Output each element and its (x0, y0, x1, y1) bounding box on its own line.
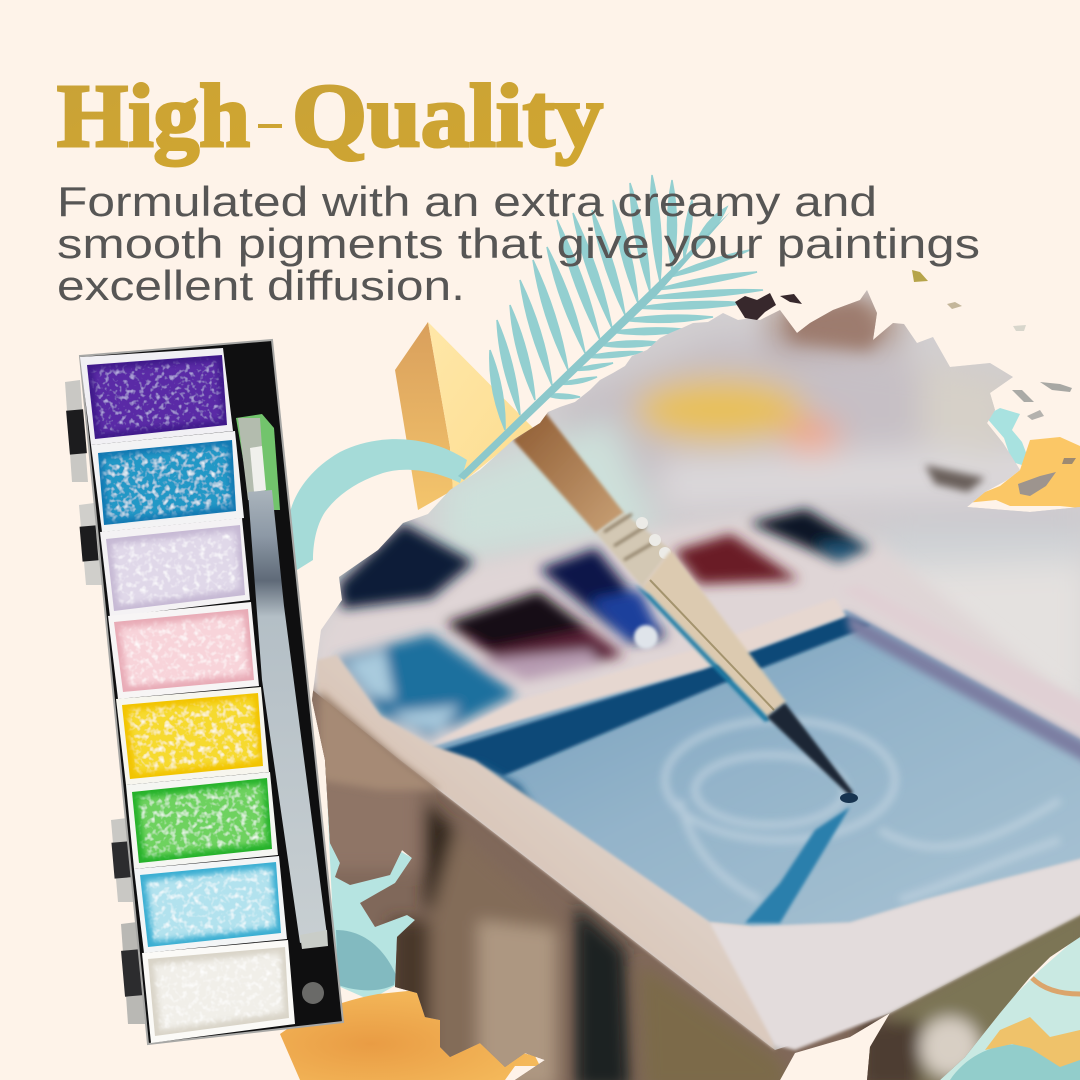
rachis (458, 212, 730, 480)
photo brush (513, 412, 858, 803)
icon: teal arc (289, 439, 467, 570)
body text: Formulated with an extra creamy and (57, 178, 877, 225)
heading: High (57, 67, 250, 166)
photo divider (431, 598, 846, 744)
tray thumb dot (302, 982, 324, 1004)
photo tray brown edge (790, 300, 880, 350)
tray hinges (65, 380, 145, 1024)
pan 5 yellow (116, 687, 269, 785)
blot above photo (735, 293, 802, 320)
photo: watercolor palette and brush (300, 285, 1080, 1080)
icon: yellow prism (395, 322, 547, 510)
pan 2 blue (91, 431, 244, 532)
pan 4 pink (108, 602, 259, 699)
splatter: bottom left teal and orange (280, 750, 540, 1080)
pan 6 green (126, 772, 278, 869)
heading: Quality (292, 67, 603, 166)
photo brush reflection (745, 807, 850, 923)
splatter: bottom right (930, 935, 1080, 1080)
pan 8 white (142, 940, 295, 1043)
pan 3 lilac (100, 518, 250, 617)
splatter: top right (912, 270, 1080, 508)
pan 7 cyan (134, 856, 287, 953)
body text: smooth pigments that give your paintings (57, 220, 980, 267)
photo background blur (440, 300, 1080, 730)
photo table wood (300, 680, 1080, 1080)
water brush (236, 414, 328, 949)
photo base (300, 285, 1080, 1080)
tray body (80, 340, 343, 1044)
photo water well (430, 584, 1080, 927)
heading (57, 67, 603, 166)
pan 1 purple (80, 348, 233, 445)
body text (57, 178, 980, 309)
photo rear tray frame (320, 518, 1074, 735)
photo tray rim (317, 655, 1080, 1050)
palette: watercolor tin (65, 340, 343, 1044)
photo water swirls (665, 720, 1060, 900)
body text: excellent diffusion. (57, 262, 465, 309)
icon: palm leaf (458, 175, 763, 480)
photo rear paint wells (337, 509, 870, 737)
